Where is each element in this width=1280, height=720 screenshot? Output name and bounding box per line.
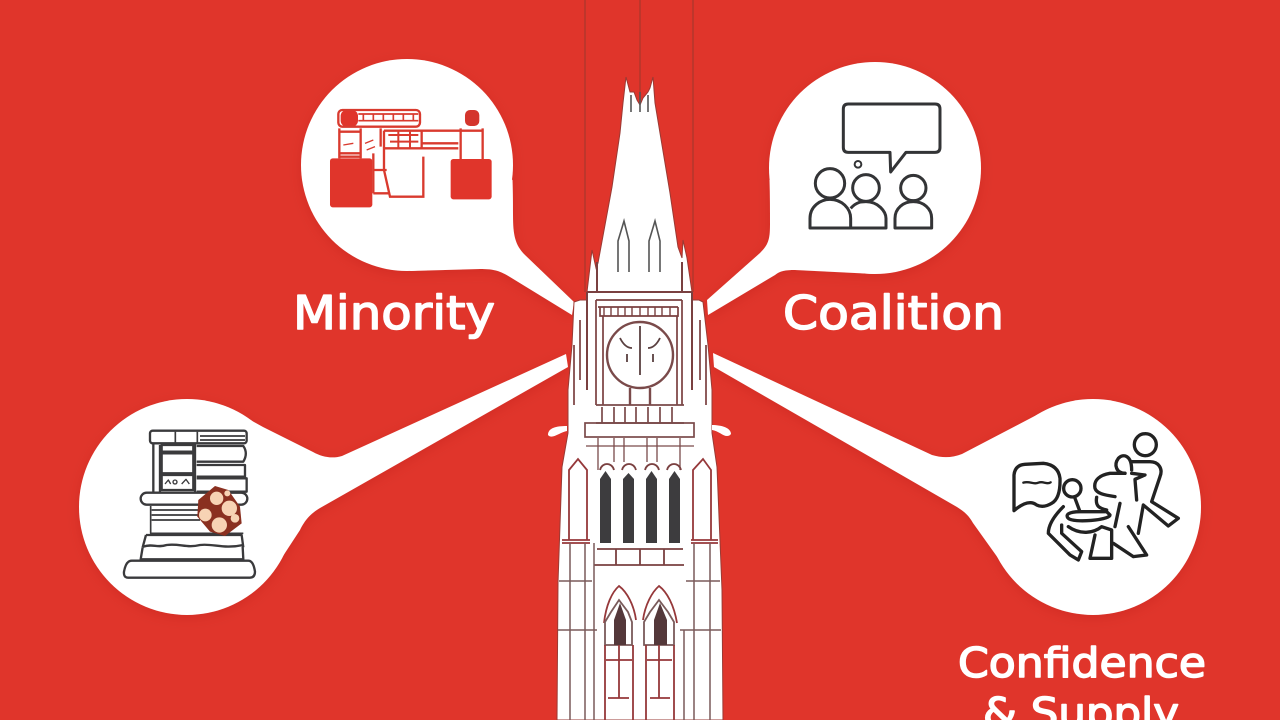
- flanking buttresses: [562, 459, 718, 543]
- flanking lower panels: [558, 543, 721, 720]
- window surround: [594, 464, 684, 565]
- icon: people helping with speech bubble: [1014, 434, 1178, 560]
- label: Minority: Minority: [293, 286, 495, 340]
- icon detail: flower: [197, 486, 242, 536]
- tower silhouette: [557, 77, 723, 720]
- icon: coalition group with speech bubble: [810, 104, 940, 228]
- bubble: lower left: [79, 354, 568, 615]
- spire details: [618, 92, 660, 272]
- tower: [548, 77, 731, 720]
- tower ears: [548, 425, 731, 437]
- label: Coalition: Coalition: [783, 286, 1004, 340]
- belfry balustrade: [585, 405, 694, 470]
- clock face: [607, 322, 673, 405]
- pinnacle and clock stage lines: [574, 262, 706, 405]
- icon: stack of books with flower: [124, 431, 255, 578]
- arched doors: [604, 586, 677, 720]
- icon: parliament chamber: [330, 110, 492, 207]
- windows: [600, 471, 680, 543]
- bubble: lower right: [713, 353, 1201, 615]
- label: Confidence and Supply: Confidence: [958, 639, 1206, 687]
- bubble: coalition: [707, 62, 981, 315]
- hanging lines: [585, 0, 693, 292]
- door openings: [614, 603, 667, 645]
- bubble: minority: [301, 59, 574, 315]
